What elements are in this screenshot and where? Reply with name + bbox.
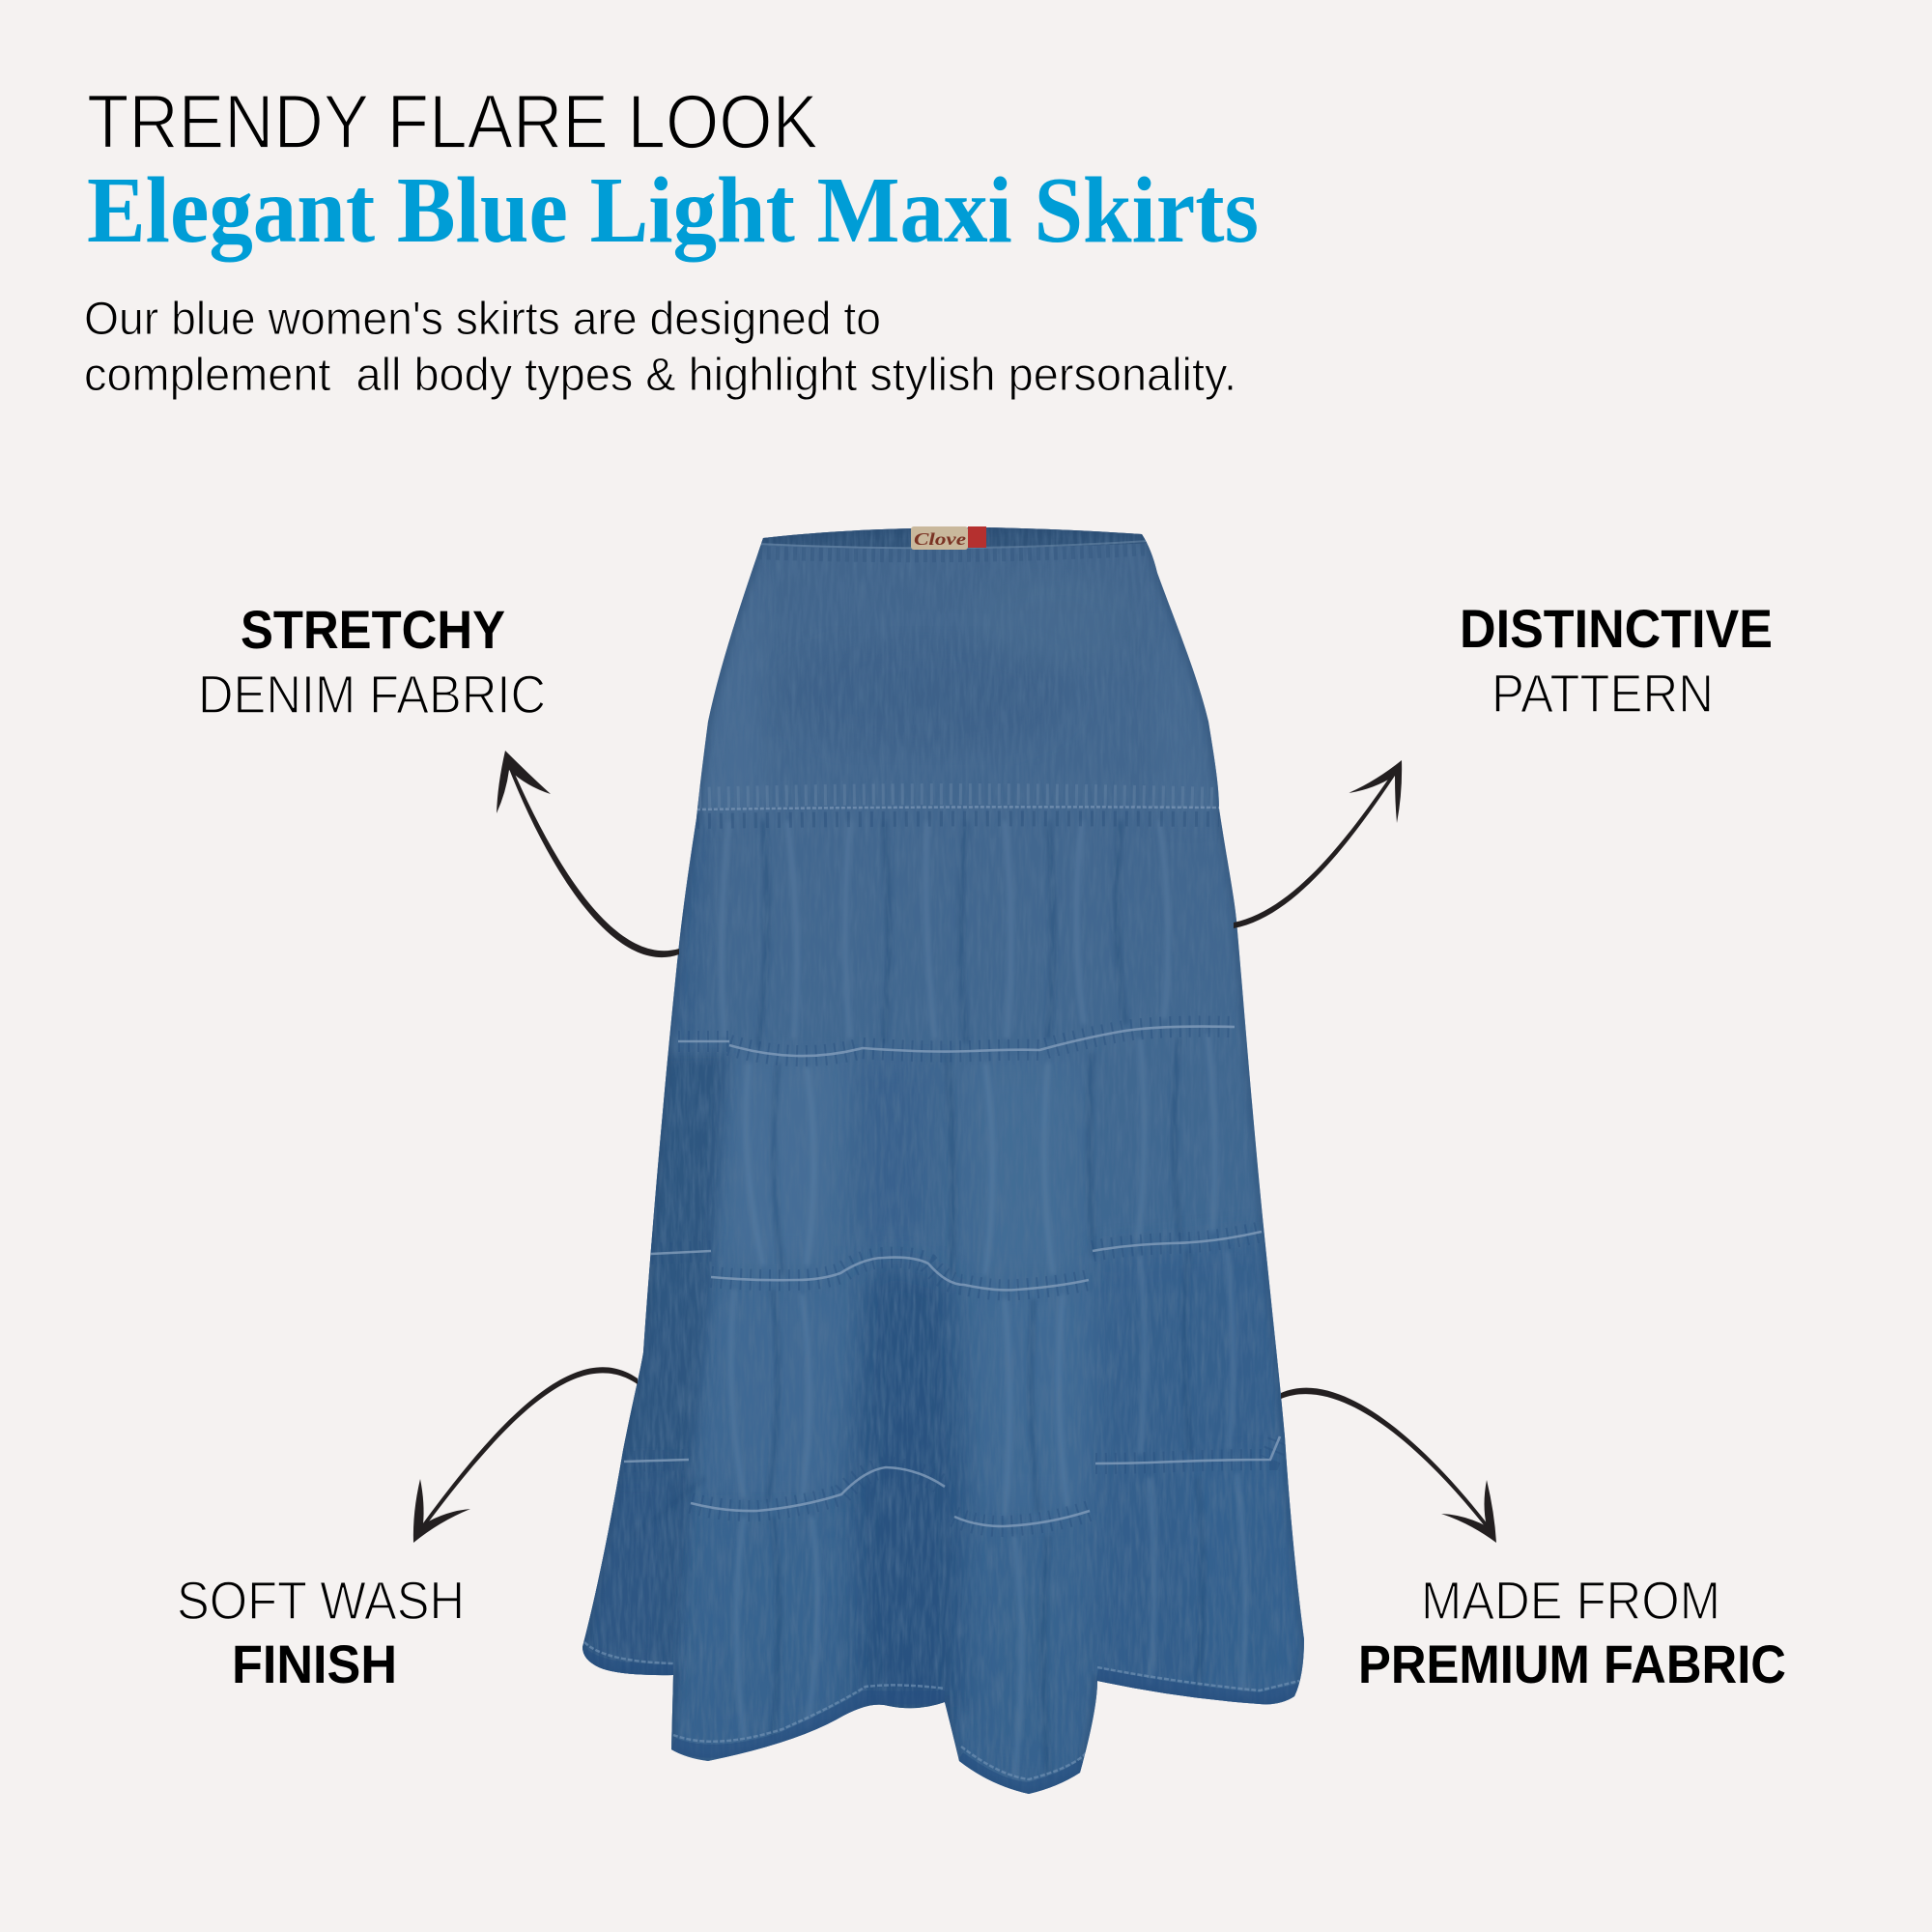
hem stitching [582,1642,1299,1789]
denim texture [570,522,1323,1806]
label: made from premium fabric [1358,1570,1786,1694]
brand label: Clove [914,529,966,549]
waistband shirring [758,541,1150,555]
arrow: skirt to distinctive pattern [1234,760,1402,928]
intro paragraph: Our blue women's skirts are designed to [84,294,881,345]
fabric folds [722,821,1245,1777]
yoke seam [696,794,1219,821]
intro paragraph [84,294,1236,401]
title: trendy flare look: TRENDY FLARE LOOK [87,78,818,164]
label: made from premium fabric: PREMIUM FABRIC [1358,1634,1786,1694]
edge shading [582,527,1304,1794]
label: distinctive pattern [1460,598,1773,724]
arrow: skirt to soft wash finish [413,1367,638,1543]
product image: denim tiered maxi skirt [570,522,1323,1806]
label: soft wash finish: FINISH [232,1634,397,1694]
brand label [911,526,986,550]
back of waistband [761,527,1148,547]
panel shading [570,816,1314,1777]
label: distinctive pattern: PATTERN [1492,663,1714,724]
label: stretchy denim fabric [198,599,546,724]
tier seams [624,1027,1280,1526]
colour correction overlay [684,544,1281,1774]
label: stretchy denim fabric: STRETCHY [241,599,505,660]
label: distinctive pattern: DISTINCTIVE [1460,598,1773,659]
label: soft wash finish [177,1570,465,1694]
heading: elegant blue light maxi skirts: Elegant Blue Light Maxi Skirts [87,158,1259,262]
yoke shading [696,541,1219,816]
arrow: stretchy to skirt [497,751,679,957]
label: made from premium fabric: MADE FROM [1421,1570,1720,1631]
label: stretchy denim fabric: DENIM FABRIC [198,664,546,724]
label: soft wash finish: SOFT WASH [177,1570,465,1631]
intro paragraph: complement all body types & highlight stylish personality. [84,350,1236,401]
arrow: skirt to premium fabric [1281,1388,1496,1543]
